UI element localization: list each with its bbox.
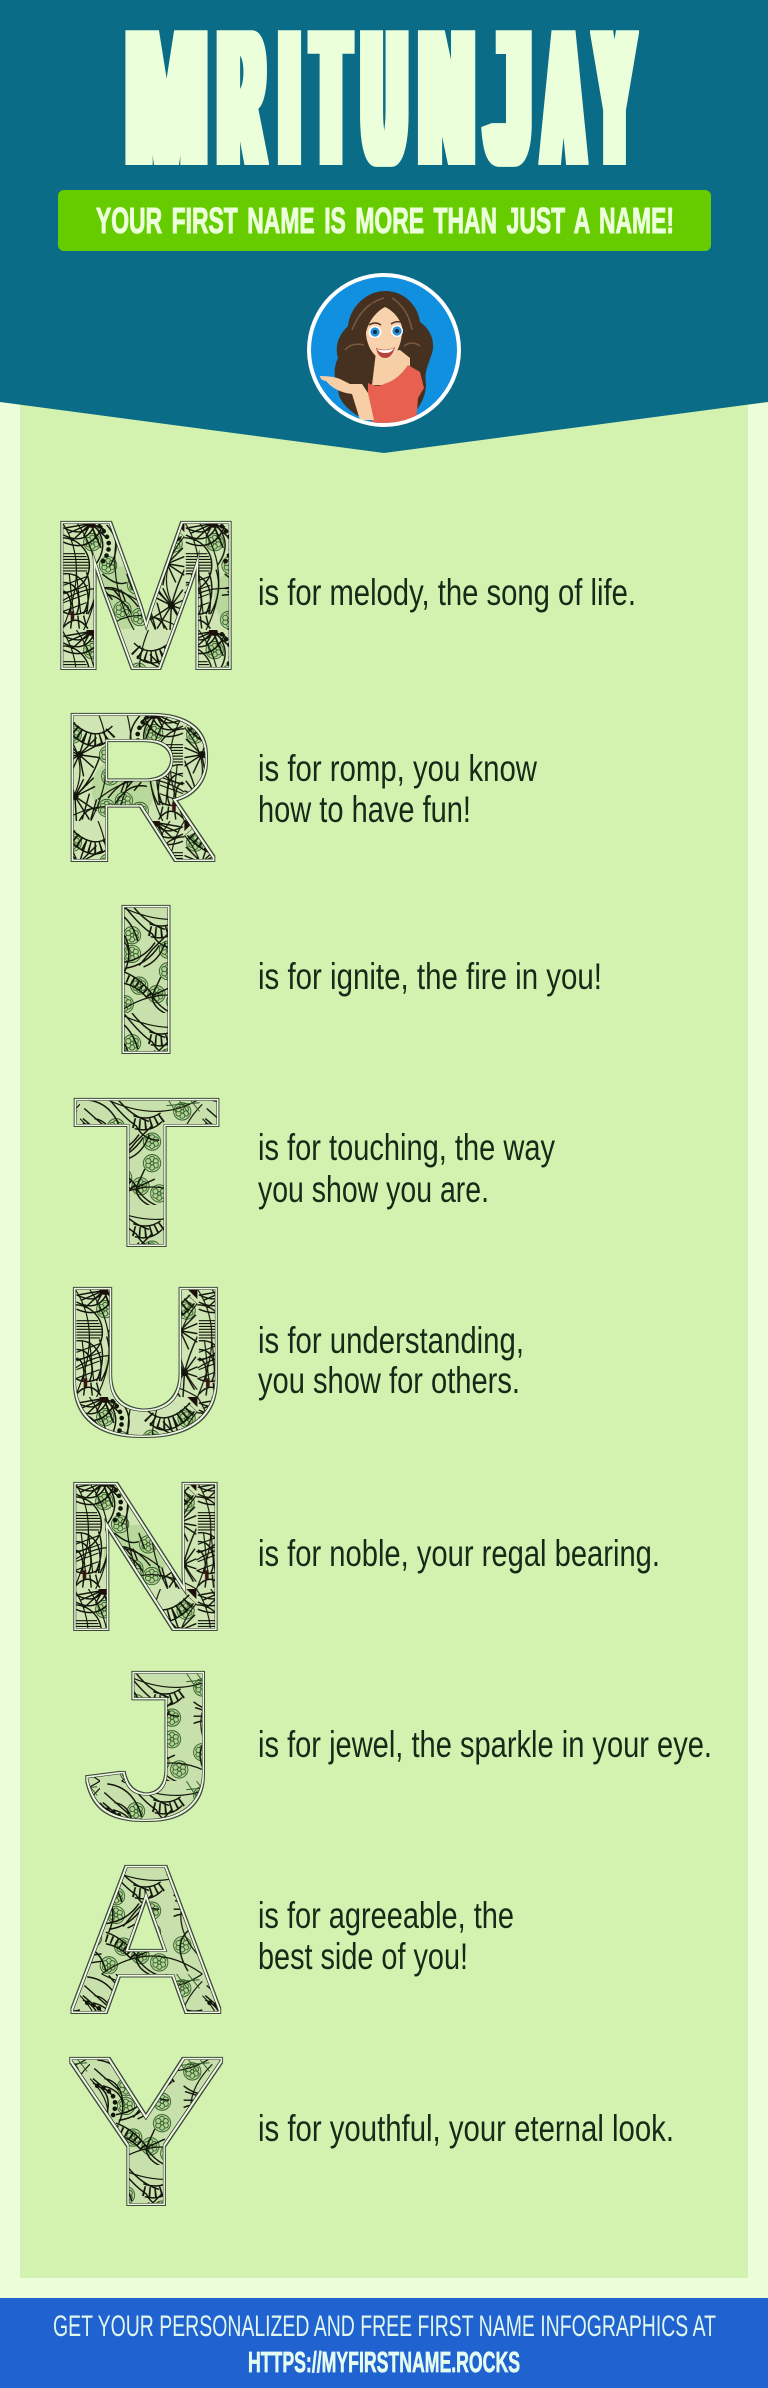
- text: understanding: [258, 1320, 524, 1401]
- text: romp: is for romp, you know: [258, 748, 537, 789]
- row I: [104, 864, 602, 1096]
- footer band: [0, 2298, 768, 2388]
- row J: [84, 1630, 712, 1862]
- text: touching: [258, 1127, 555, 1210]
- text: touching: is for touching, the way: [258, 1127, 555, 1168]
- letter N: N: [60, 1441, 230, 1673]
- text: agreeable: best side of you!: [258, 1936, 468, 1977]
- panel: main light green content: [20, 380, 748, 2278]
- text: romp: how to have fun!: [258, 789, 471, 830]
- letter J: J: [84, 1630, 218, 1862]
- text: agreeable: is for agreeable, the: [258, 1895, 514, 1936]
- letter U: U: [62, 1246, 229, 1478]
- subtitle banner: [58, 190, 711, 251]
- row M: [48, 480, 636, 712]
- row A: [68, 1824, 514, 2056]
- letter M: M: [48, 480, 244, 712]
- icon: avatar of smiling woman in circle: [307, 273, 461, 427]
- text: understanding: is for understanding,: [258, 1320, 524, 1361]
- text: romp: [258, 748, 537, 830]
- row R: [59, 672, 537, 904]
- row U: [62, 1246, 524, 1478]
- letter T: T: [74, 1057, 219, 1289]
- footer url: HTTPS://MYFIRSTNAME.ROCKS: [248, 2347, 520, 2379]
- text: youthful: is for youthful, your eternal look.: [258, 2108, 674, 2149]
- header banner: teal chevron: [0, 0, 768, 453]
- row T: [74, 1057, 555, 1289]
- text: understanding: you show for others.: [258, 1360, 520, 1401]
- letter Y: Y: [68, 2016, 224, 2248]
- text: agreeable: [258, 1895, 514, 1977]
- text: ignite: is for ignite, the fire in you!: [258, 956, 602, 997]
- letter R: R: [59, 672, 217, 904]
- text: melody: is for melody, the song of life.: [258, 572, 636, 613]
- text: touching: you show you are.: [258, 1169, 489, 1210]
- row N: [60, 1441, 660, 1673]
- letter A: A: [68, 1824, 224, 2056]
- row Y: [68, 2016, 674, 2248]
- text: noble: is for noble, your regal bearing.: [258, 1533, 660, 1574]
- letter I: I: [104, 864, 188, 1096]
